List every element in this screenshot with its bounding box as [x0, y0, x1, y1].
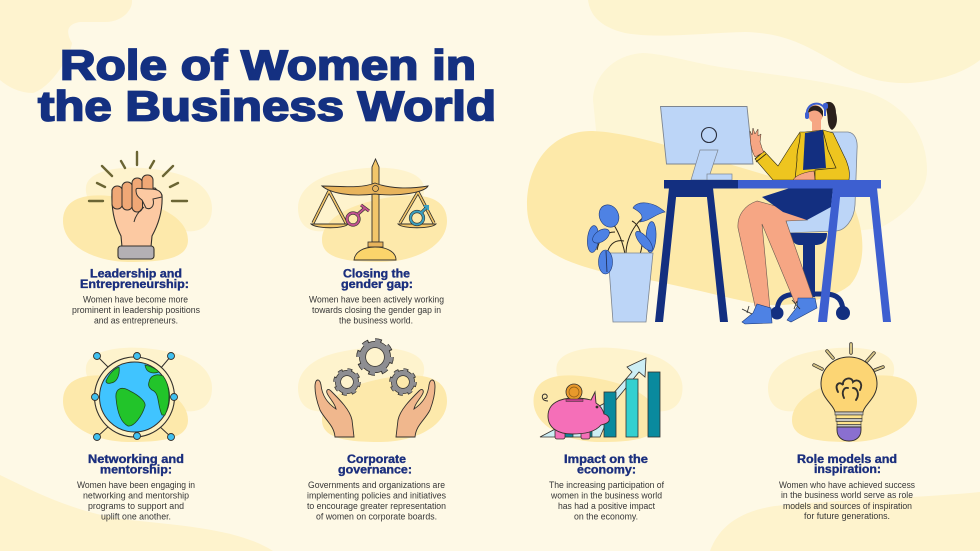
panel: role models and inspiration: for future generations. [804, 511, 890, 521]
panel: impact on the economy [534, 348, 682, 522]
panel: leadership and entrepreneurship: prominent in leadership positions [72, 305, 200, 315]
title [38, 42, 496, 130]
panel: closing the gender gap [298, 159, 447, 326]
panel: impact on the economy: on the economy. [574, 512, 638, 522]
chair [770, 132, 857, 320]
panel: corporate governance: to encourage greater representation [307, 501, 446, 511]
heading: Leadership and [90, 268, 182, 280]
panel: networking and mentorship: mentorship: [100, 464, 172, 476]
heading: Corporate [347, 454, 406, 466]
heading: Impact on the [564, 454, 648, 466]
panel: role models and inspiration [768, 344, 917, 521]
icon: hands and gears [298, 341, 447, 442]
heading: Networking and [88, 454, 184, 466]
description: Women who have achieved success [779, 480, 915, 490]
panel: networking and mentorship: programs to support and [88, 501, 184, 511]
icon: globe network [63, 348, 212, 442]
panel: role models and inspiration: in the business world serve as role [781, 490, 913, 500]
description: Women have become more [83, 294, 188, 304]
plant [586, 202, 665, 322]
description: Women have been engaging in [77, 480, 195, 490]
panel: networking and mentorship [63, 348, 212, 522]
panel: closing the gender gap: towards closing the gender gap in [312, 305, 441, 315]
panel: leadership and entrepreneurship: Entrepreneurship: [80, 279, 189, 291]
woman [738, 102, 849, 324]
icon: balance scale [298, 159, 447, 262]
panel: impact on the economy: economy: [577, 464, 636, 476]
panel: networking and mentorship: uplift one another. [101, 512, 171, 522]
description: The increasing participation of [549, 480, 664, 490]
icon: piggy bank and growth chart [534, 348, 682, 442]
panel: corporate governance: implementing policies and initiatives [307, 490, 446, 500]
description: Women have been actively working [309, 294, 444, 304]
panel: networking and mentorship: networking and mentorship [83, 490, 189, 500]
panel: corporate governance [298, 341, 447, 522]
desk [655, 180, 891, 322]
panel: closing the gender gap: gender gap: [341, 279, 413, 291]
icon: raised fist [63, 152, 212, 262]
title: the Business World [38, 82, 496, 130]
panel: leadership and entrepreneurship: and as entrepreneurs. [94, 316, 178, 326]
icon: light bulb [768, 344, 917, 442]
panel: impact on the economy: women in the business world [550, 490, 662, 500]
panel: role models and inspiration: models and sources of inspiration [783, 501, 912, 511]
panel: role models and inspiration: inspiration: [814, 464, 881, 476]
title: Role of Women in [60, 42, 476, 88]
panel: corporate governance: of women on corporate boards. [316, 512, 437, 522]
monitor [660, 106, 753, 180]
description: Governments and organizations are [308, 480, 445, 490]
illustration: woman at desk [586, 102, 891, 324]
heading: Role models and [797, 454, 897, 466]
panel: leadership and entrepreneurship [63, 152, 212, 326]
heading: Closing the [343, 268, 410, 280]
panel: impact on the economy: has had a positive impact [558, 501, 655, 511]
panel: closing the gender gap: the business world. [339, 316, 413, 326]
panel: corporate governance: governance: [338, 464, 412, 476]
